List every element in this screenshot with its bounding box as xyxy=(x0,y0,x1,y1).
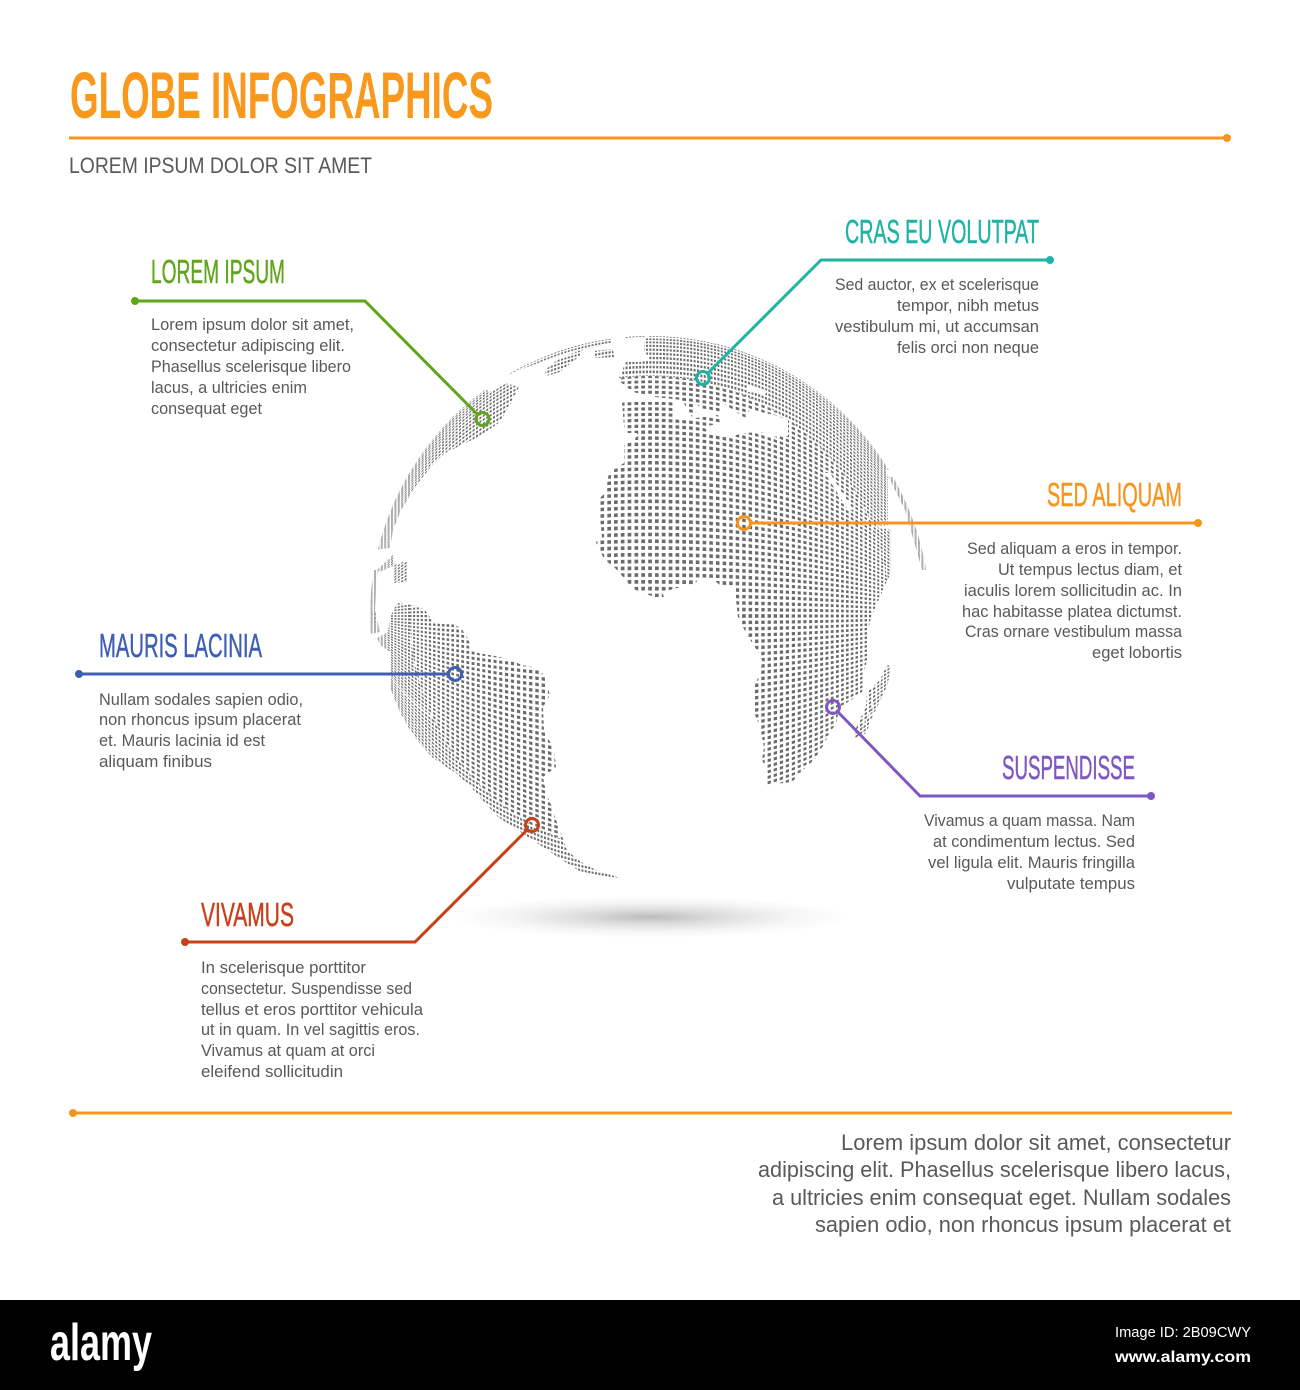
body: suspendisse xyxy=(924,812,1136,893)
footer paragraph: sapien odio, non rhoncus ipsum placerat et xyxy=(815,1212,1231,1237)
callout: lorem ipsum xyxy=(132,253,489,426)
dotted globe xyxy=(370,336,930,896)
heading: suspendisse: SUSPENDISSE xyxy=(1002,749,1135,786)
body: vivamus: eleifend sollicitudin xyxy=(201,1063,343,1081)
callout: suspendisse xyxy=(826,700,1154,893)
title: GLOBE INFOGRAPHICS xyxy=(70,58,493,132)
image id: Image ID: 2B09CWY xyxy=(1115,1324,1251,1341)
body: mauris lacinia xyxy=(99,691,303,771)
body: vivamus: consectetur. Suspendisse sed xyxy=(201,980,412,998)
body: mauris lacinia: non rhoncus ipsum placerat xyxy=(99,711,301,729)
body: sed aliquam: Ut tempus lectus diam, et xyxy=(998,561,1182,579)
body: sed aliquam: hac habitasse platea dictumst. xyxy=(962,603,1182,621)
body: lorem ipsum: consectetur adipiscing elit. xyxy=(151,337,345,355)
footer rule with start dot xyxy=(69,1109,1232,1117)
leader line: green xyxy=(132,298,489,426)
body: vivamus: In scelerisque porttitor xyxy=(201,959,367,977)
heading: cras eu volutpat: CRAS EU VOLUTPAT xyxy=(845,213,1039,250)
body: lorem ipsum: Phasellus scelerisque libero xyxy=(151,358,351,376)
body: cras eu volutpat: felis orci non neque xyxy=(897,339,1039,357)
body: sed aliquam: Cras ornare vestibulum massa xyxy=(965,623,1183,641)
body: cras eu volutpat xyxy=(835,276,1039,357)
body: suspendisse: at condimentum lectus. Sed xyxy=(933,833,1135,851)
leader line: purple xyxy=(826,700,1154,798)
leader line: orange xyxy=(738,516,1200,530)
body: cras eu volutpat: Sed auctor, ex et scelerisque xyxy=(835,276,1039,294)
body: suspendisse: vel ligula elit. Mauris fringilla xyxy=(928,854,1136,872)
body: lorem ipsum: lacus, a ultricies enim xyxy=(151,379,307,397)
callout: mauris lacinia xyxy=(76,627,462,771)
body: vivamus: tellus et eros porttitor vehicula xyxy=(201,1001,424,1019)
callout: cras eu volutpat xyxy=(696,213,1052,384)
body: sed aliquam: Sed aliquam a eros in tempor. xyxy=(967,540,1182,558)
body: vivamus: ut in quam. In vel sagittis eros. xyxy=(201,1021,420,1039)
body: sed aliquam: eget lobortis xyxy=(1092,644,1182,662)
body: vivamus: Vivamus at quam at orci xyxy=(201,1042,375,1060)
footer paragraph: a ultricies enim consequat eget. Nullam sodales xyxy=(772,1185,1231,1210)
subtitle: LOREM IPSUM DOLOR SIT AMET xyxy=(69,153,372,178)
body: mauris lacinia: et. Mauris lacinia id est xyxy=(99,732,265,750)
body: mauris lacinia: Nullam sodales sapien odio, xyxy=(99,691,303,709)
heading: lorem ipsum: LOREM IPSUM xyxy=(151,253,285,290)
body: lorem ipsum: Lorem ipsum dolor sit amet, xyxy=(151,316,354,334)
body: cras eu volutpat: tempor, nibh metus xyxy=(897,297,1039,315)
heading: vivamus: VIVAMUS xyxy=(201,896,294,933)
header rule with end dot xyxy=(69,134,1231,142)
body: mauris lacinia: aliquam finibus xyxy=(99,753,212,771)
callout: sed aliquam xyxy=(738,476,1200,662)
globe shadow xyxy=(450,896,850,938)
site url: www.alamy.com xyxy=(1114,1349,1251,1366)
callout: vivamus xyxy=(182,818,538,1081)
body: suspendisse: Vivamus a quam massa. Nam xyxy=(924,812,1135,830)
watermark footer band xyxy=(0,1300,1300,1390)
leader line: blue xyxy=(76,668,462,680)
leader line: red xyxy=(182,818,538,944)
heading: sed aliquam: SED ALIQUAM xyxy=(1047,476,1182,513)
body: vivamus xyxy=(201,959,424,1081)
footer paragraph: adipiscing elit. Phasellus scelerisque libero lacus, xyxy=(758,1157,1231,1182)
footer paragraph xyxy=(758,1130,1231,1237)
logo text: alamy: alamy xyxy=(50,1314,152,1372)
body: cras eu volutpat: vestibulum mi, ut accumsan xyxy=(835,318,1039,336)
body: sed aliquam xyxy=(962,540,1183,662)
body: suspendisse: vulputate tempus xyxy=(1007,875,1135,893)
body: sed aliquam: iaculis lorem sollicitudin ac. In xyxy=(964,582,1182,600)
footer paragraph: Lorem ipsum dolor sit amet, consectetur xyxy=(841,1130,1231,1155)
body: lorem ipsum xyxy=(151,316,354,418)
heading: mauris lacinia: MAURIS LACINIA xyxy=(99,627,262,664)
leader line: teal xyxy=(696,258,1052,384)
body: lorem ipsum: consequat eget xyxy=(151,400,262,418)
